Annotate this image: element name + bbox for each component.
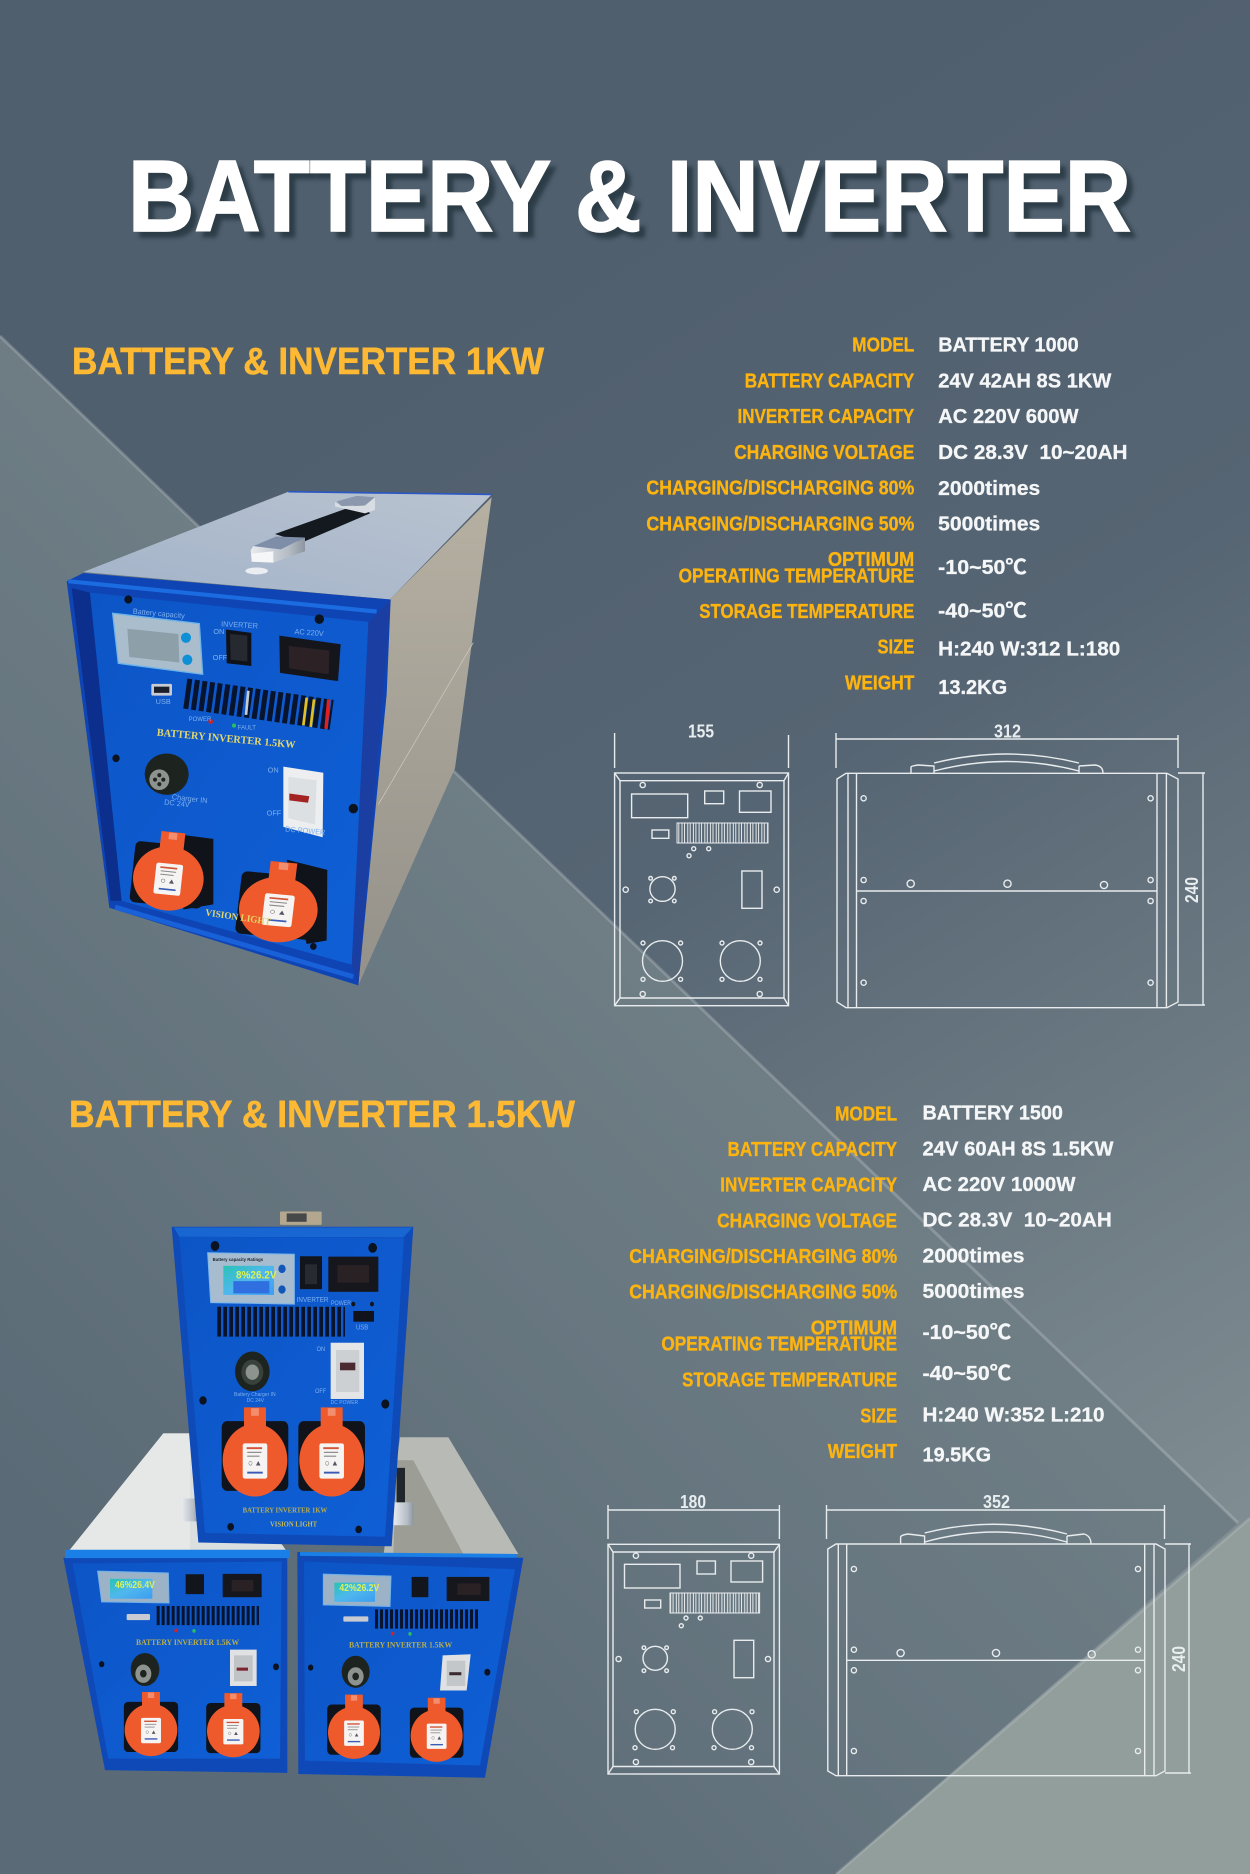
spec table: 1.5KW: H:240 W:352 L:210 [922, 1403, 1104, 1426]
dimension drawing: 1KW side view [836, 722, 1205, 1008]
spec table: 1KW: CHARGING/DISCHARGING 50% [646, 512, 914, 535]
spec table: 1.5KW: BATTERY CAPACITY [728, 1138, 897, 1161]
spec table: 1KW: BATTERY 1000 [938, 334, 1079, 357]
title: BATTERY & INVERTER [128, 141, 1131, 253]
spec table: 1.5KW: INVERTER CAPACITY [720, 1174, 897, 1197]
top unit: POWER [331, 1301, 351, 1307]
front panel details: OFF [213, 653, 228, 662]
dimension: 312: 312 [994, 722, 1021, 742]
front panel details: VISION LIGHT [205, 908, 272, 928]
spec table: 1.5KW: -40~50℃ [922, 1362, 1012, 1385]
spec table: 1.5KW: 19.5KG [922, 1444, 991, 1467]
dimension: 180: 180 [680, 1492, 706, 1512]
front panel details: USB [156, 697, 171, 706]
lower right unit [297, 1552, 523, 1778]
lower left unit: 46%26.4V [115, 1579, 156, 1590]
front panel details: Charger IN [171, 792, 208, 805]
top unit: USB [356, 1324, 368, 1331]
heading: 1.5KW section: BATTERY & INVERTER 1.5KW [69, 1094, 575, 1136]
product photo: 1KW unit [67, 492, 492, 985]
spec table: 1.5KW: CHARGING/DISCHARGING 80% [629, 1245, 897, 1268]
product photo: stacked 1.5KW units [63, 1211, 523, 1778]
spec table: 1KW: 5000times [938, 513, 1040, 536]
front panel details: Battery capacity [132, 607, 185, 620]
lower right unit: BATTERY INVERTER 1.5KW [349, 1640, 453, 1650]
spec table: 1.5KW: AC 220V 1000W [922, 1173, 1076, 1196]
spec table: 1.5KW: 24V 60AH 8S 1.5KW [922, 1137, 1114, 1160]
spec table: 1KW: 2000times [938, 477, 1040, 500]
front panel details: AC 220V [294, 627, 324, 638]
spec table: 1KW: DC 28.3V 10~20AH [938, 441, 1128, 464]
front panel details: ON [213, 627, 224, 636]
front panel details: ON [268, 765, 279, 774]
spec table: 1KW: -40~50℃ [938, 599, 1027, 622]
spec table: 1.5KW: STORAGE TEMPERATURE [682, 1368, 897, 1391]
spec table: 1KW: H:240 W:312 L:180 [938, 638, 1120, 661]
spec table: 1KW: -10~50℃ [938, 556, 1027, 579]
spec table: 1KW: OPERATING TEMPERATURE [679, 564, 914, 587]
dimension drawing: 1.5KW front view [608, 1492, 779, 1774]
lower left unit: BATTERY INVERTER 1.5KW [136, 1638, 240, 1647]
top unit: Battery capacity Ratings [213, 1257, 264, 1262]
top unit [172, 1227, 413, 1546]
lower left unit [63, 1554, 290, 1773]
spec table: 1.5KW: CHARGING VOLTAGE [717, 1209, 897, 1232]
spec table: 1.5KW: CHARGING/DISCHARGING 50% [629, 1281, 897, 1304]
spec table: 1.5KW: SIZE [860, 1404, 897, 1427]
spec table: 1.5KW: MODEL [835, 1102, 897, 1125]
front panel details: DC POWER [285, 824, 326, 837]
spec table: 1KW: 13.2KG [938, 676, 1007, 699]
lower units top faces [65, 1211, 518, 1556]
top unit: INVERTER [297, 1296, 329, 1304]
spec table: 1.5KW: WEIGHT [828, 1440, 897, 1463]
handle [245, 496, 375, 574]
front panel details: INVERTER [221, 619, 259, 630]
spec table: 1KW: BATTERY CAPACITY [745, 370, 915, 393]
top unit: OFF [315, 1388, 327, 1395]
dimension drawing: 1.5KW side view [826, 1492, 1191, 1776]
heading: 1KW section: BATTERY & INVERTER 1KW [72, 341, 544, 383]
spec table: 1.5KW: 2000times [922, 1244, 1024, 1267]
spec table: 1.5KW: DC 28.3V 10~20AH [922, 1209, 1112, 1232]
spec table: 1KW: AC 220V 600W [938, 405, 1079, 428]
top unit: DC POWER [331, 1400, 358, 1406]
front panel details [112, 595, 358, 950]
spec table: 1KW [646, 334, 1128, 699]
spec table: 1KW: 24V 42AH 8S 1KW [938, 370, 1112, 393]
dimension: 155: 155 [688, 722, 714, 742]
spec table: 1.5KW: -10~50℃ [922, 1321, 1012, 1344]
top unit: BATTERY INVERTER 1KW [243, 1506, 328, 1515]
spec table: 1.5KW [629, 1101, 1114, 1467]
spec table: 1.5KW: OPTIMUM [811, 1316, 897, 1339]
top unit: 8%26.2V [236, 1269, 277, 1282]
spec table: 1KW: CHARGING/DISCHARGING 80% [646, 477, 914, 500]
top unit: VISION LIGHT [270, 1520, 317, 1529]
dimension: 240: 240 [1182, 877, 1202, 903]
dimension: 240: 240 [1169, 1646, 1189, 1672]
dimension: 352: 352 [983, 1492, 1010, 1512]
lower right unit: 42%26.2V [339, 1583, 380, 1593]
spec table: 1KW: INVERTER CAPACITY [738, 405, 915, 428]
spec table: 1.5KW: 5000times [922, 1280, 1024, 1303]
front panel details: OFF [267, 808, 282, 818]
spec table: 1KW: OPTIMUM [828, 548, 914, 571]
spec table: 1KW: MODEL [852, 334, 914, 357]
top unit: Battery Charger IN [234, 1392, 276, 1398]
front panel details: FAULT [238, 724, 256, 731]
top unit: ON [317, 1345, 325, 1353]
front panel details: POWER [189, 716, 212, 723]
spec table: 1KW: CHARGING VOLTAGE [734, 441, 914, 464]
top unit: DC 24V [247, 1398, 265, 1404]
dimension drawing: 1KW front view [615, 722, 788, 1006]
spec table: 1.5KW: BATTERY 1500 [922, 1101, 1063, 1124]
front panel details: DC 24V [164, 797, 190, 809]
spec table: 1KW: STORAGE TEMPERATURE [699, 600, 914, 623]
spec table: 1KW: WEIGHT [845, 671, 915, 694]
front panel details: BATTERY INVERTER 1.5KW [156, 727, 296, 751]
spec table: 1KW: SIZE [878, 636, 914, 659]
spec table: 1.5KW: OPERATING TEMPERATURE [661, 1333, 897, 1356]
